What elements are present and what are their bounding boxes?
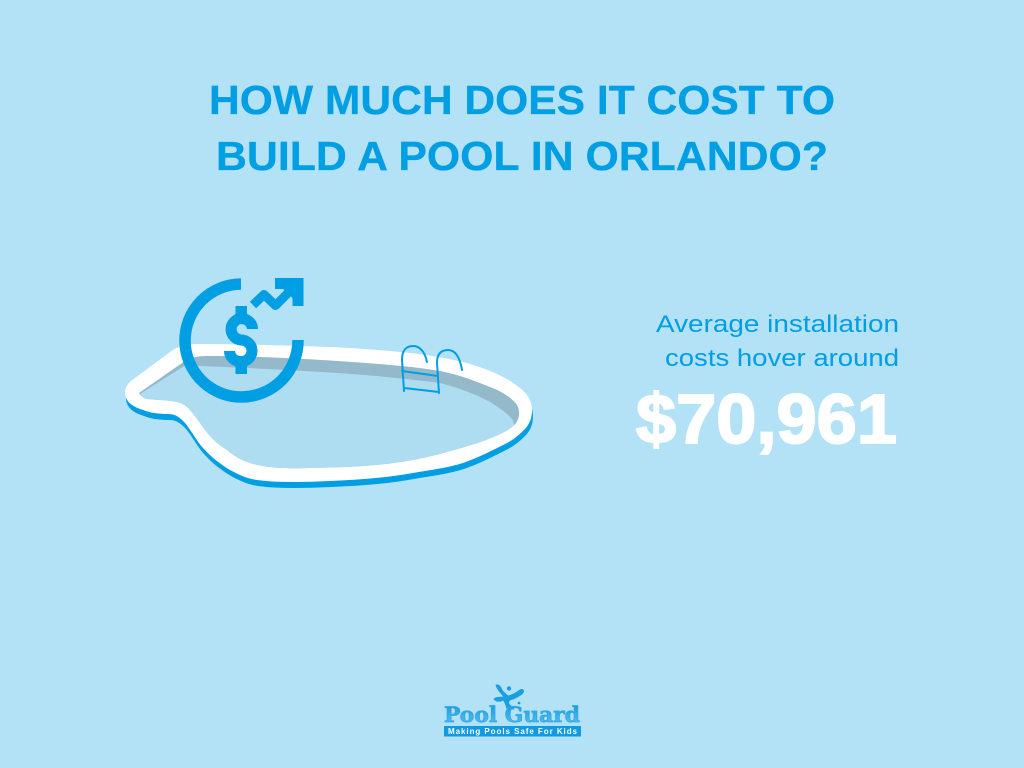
illustration: swimming pool [120,344,533,500]
icon: pool ladder [402,346,462,393]
text: average installation costs: costs hover around [665,345,899,372]
icon: dollar with rising arrow [185,278,304,397]
title: HOW MUCH DOES IT COST TO [209,77,835,123]
logo: Pool Guard [444,685,581,736]
icon: water splash [494,685,523,709]
title [209,77,835,179]
logo banner [444,726,581,736]
big number: cost: $70,961 [636,380,897,458]
text: average installation costs: Average installation [656,311,899,338]
text: average installation costs [656,311,899,372]
logo: Pool Guard: Making Pools Safe For Kids [448,727,578,736]
logo: Pool Guard: Pool Guard [444,702,580,727]
title: BUILD A POOL IN ORLANDO? [216,133,828,179]
